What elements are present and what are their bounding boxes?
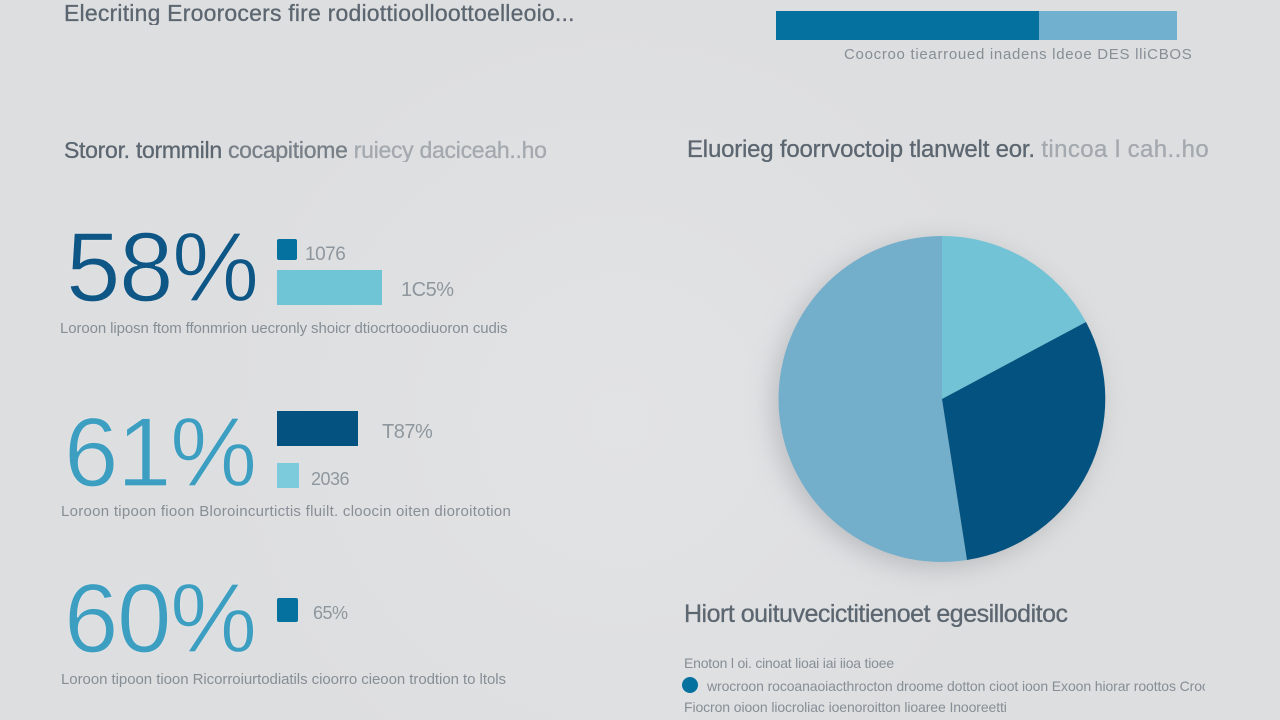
value label: 1076 <box>305 244 345 265</box>
pie chart <box>762 232 1108 578</box>
legend dot <box>682 677 698 693</box>
stat 61% <box>61 397 511 519</box>
slice: dark blue <box>942 322 1105 560</box>
small light square <box>277 463 299 488</box>
light bar <box>277 270 382 305</box>
top stacked bar <box>776 11 1177 40</box>
value label: 65% <box>313 603 348 623</box>
pie shadow <box>773 242 1099 568</box>
bar label: T87% <box>382 421 432 443</box>
value label: 2036 <box>311 469 349 489</box>
slice: mid blue <box>779 236 967 562</box>
slice: teal <box>942 236 1086 399</box>
stat 60% <box>61 563 506 687</box>
stat value: 61% <box>64 397 256 507</box>
stat value: 58% <box>66 212 258 322</box>
small square marker <box>277 239 297 260</box>
dark bar <box>277 411 358 446</box>
small square marker <box>277 598 298 622</box>
stat value: 60% <box>64 563 256 673</box>
bar label: 1C5% <box>401 279 453 301</box>
stat 58% <box>60 212 507 336</box>
